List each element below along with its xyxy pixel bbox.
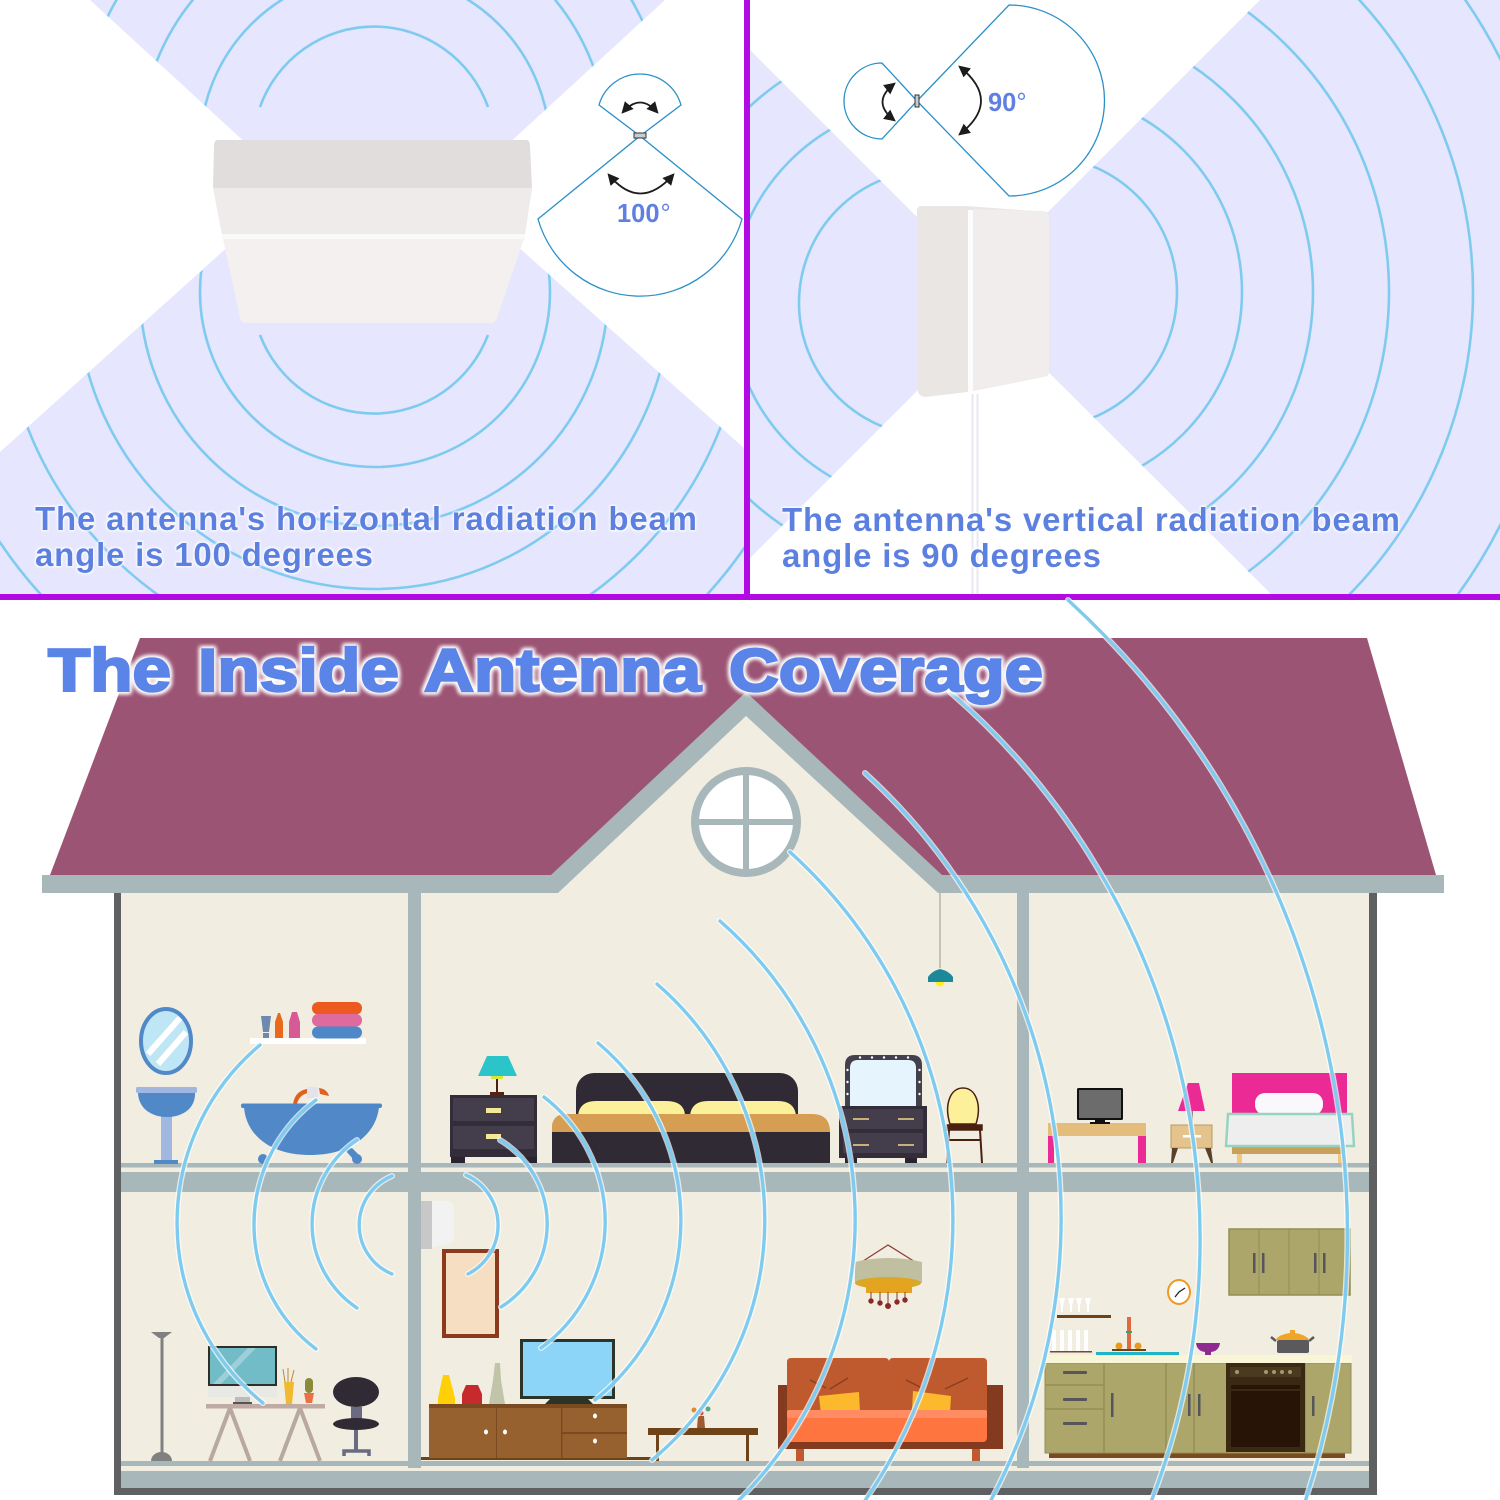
label: 100 degrees: 100° — [617, 200, 671, 228]
wash basin — [136, 1087, 197, 1164]
house walls — [114, 700, 1376, 1495]
polar diagram: vertical 90 degrees — [844, 5, 1104, 196]
title: Inside — [198, 637, 399, 704]
title: Coverage — [729, 637, 1043, 704]
panel: vertical radiation beam — [750, 0, 1500, 594]
purple bowl — [1196, 1343, 1220, 1355]
title — [48, 637, 1043, 704]
panel: horizontal radiation beam — [0, 0, 744, 594]
pink table lamp and side table — [1171, 1083, 1213, 1163]
kitchen counter and cabinets — [1045, 1355, 1352, 1458]
signal arcs in house — [177, 600, 1347, 1500]
single bed — [1226, 1073, 1354, 1163]
double bed — [552, 1073, 830, 1163]
wall picture frame — [444, 1251, 497, 1336]
caption: vertical beam: angle is 90 degrees — [782, 537, 1101, 574]
signal arcs: left of antenna — [177, 1045, 392, 1403]
radiation wedges: horizontal — [0, 0, 744, 594]
round window — [695, 771, 797, 873]
label: 90 degrees: 90° — [988, 89, 1027, 117]
office chair — [333, 1377, 379, 1456]
sideboard — [421, 1404, 651, 1460]
bathroom mirror — [141, 1009, 191, 1073]
wine glasses and plates — [1050, 1298, 1111, 1352]
wall clock — [1168, 1280, 1190, 1304]
title: Antenna — [424, 637, 702, 704]
television — [520, 1339, 615, 1405]
radiation arcs: vertical left — [750, 80, 883, 526]
outer dark walls — [114, 893, 1377, 1495]
coffee table with flowers — [648, 1406, 758, 1461]
kitchen tap and sink — [1096, 1317, 1179, 1356]
roof — [50, 638, 1436, 875]
hanging lamp — [928, 893, 953, 986]
radiation arcs: horizontal bottom — [0, 270, 744, 594]
bathroom shelf with towels — [250, 1002, 366, 1044]
vanity dresser — [839, 1055, 927, 1163]
house — [42, 638, 1444, 1495]
dividers: purple frame — [0, 0, 1500, 600]
title: The — [48, 637, 171, 704]
study desk and monitor — [1048, 1088, 1146, 1163]
caption: vertical beam: The antenna's vertical radiation beam — [782, 501, 1400, 538]
cooking pot — [1271, 1330, 1314, 1353]
caption: horizontal beam: The antenna's horizontal radiation beam — [35, 500, 697, 537]
upper kitchen cabinets — [1229, 1229, 1350, 1295]
chandelier — [855, 1245, 922, 1309]
vases — [438, 1363, 505, 1404]
oven — [1226, 1363, 1305, 1452]
cable — [972, 394, 978, 594]
office desk and computer — [206, 1346, 325, 1461]
gable trim — [42, 692, 1444, 893]
radiation wedges: vertical — [750, 0, 1500, 594]
nightstand and lamp — [450, 1056, 537, 1163]
structure: floors and columns — [121, 893, 1369, 1488]
bedroom chair — [947, 1088, 982, 1163]
signal arcs: right of antenna — [466, 600, 1347, 1500]
caption: horizontal beam: angle is 100 degrees — [35, 536, 373, 573]
small indoor antenna — [421, 1201, 454, 1250]
bathtub — [241, 1087, 382, 1164]
radiation arcs: horizontal top — [106, 0, 644, 110]
radiation arcs: vertical right — [1092, 0, 1500, 594]
polar diagram: horizontal 100 degrees — [538, 74, 742, 296]
antenna: ceiling unit — [213, 140, 532, 323]
floor lamp — [151, 1332, 172, 1461]
antenna: wall panel — [917, 206, 1049, 397]
sofa — [778, 1358, 1003, 1461]
